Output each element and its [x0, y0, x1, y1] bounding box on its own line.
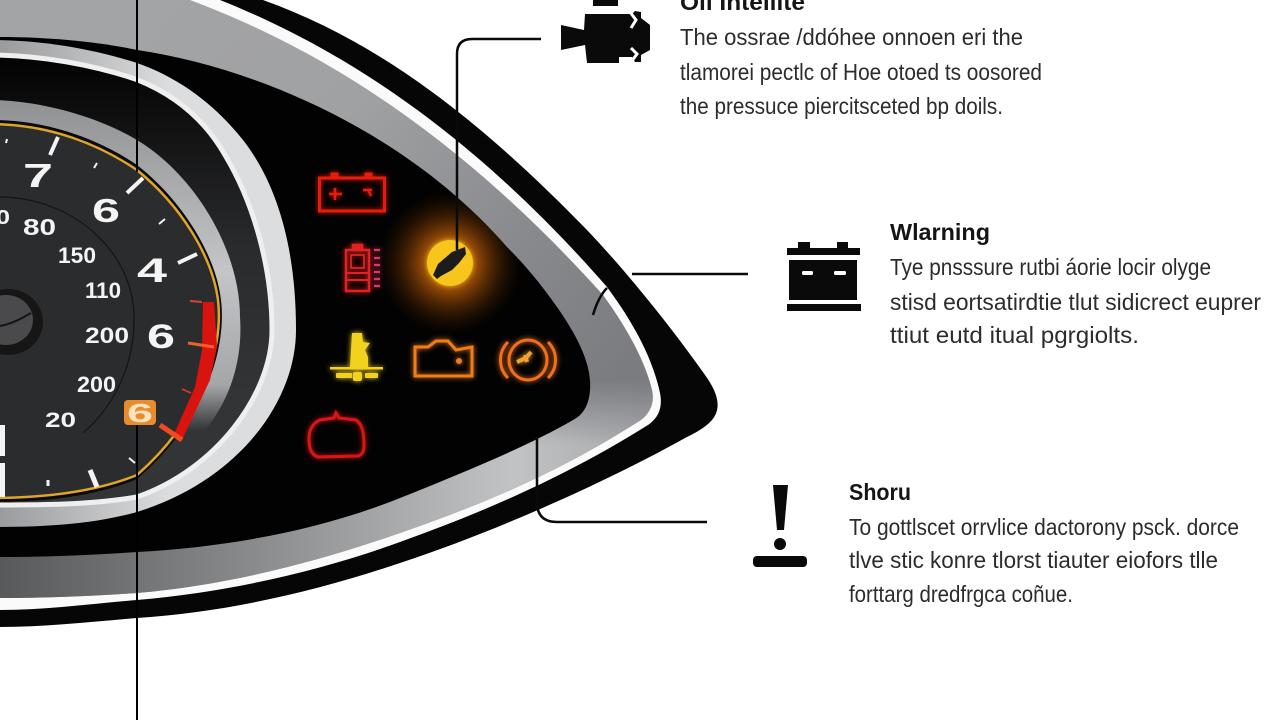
callout arrow: short	[537, 438, 707, 522]
text block: oil interlite	[680, 0, 1042, 119]
gauge numerals: 150	[58, 243, 96, 268]
text block: warning: Wlarning	[890, 219, 990, 245]
gauge numerals: 7	[23, 157, 53, 194]
icon: engine	[561, 0, 650, 63]
icon: battery	[787, 242, 861, 311]
warning light: red oil outline	[309, 413, 364, 457]
gauge numerals: 110	[85, 278, 121, 303]
warning light: orange engine outline	[415, 341, 472, 376]
text block: warning	[890, 219, 1261, 348]
text block: short: Shoru	[849, 479, 911, 505]
gauge numerals: 6	[92, 192, 120, 229]
gauge numerals: 200	[85, 323, 129, 348]
gauge	[0, 40, 296, 527]
text block: short	[849, 479, 1239, 607]
black display panel	[0, 37, 590, 557]
long vertical divider line	[136, 0, 138, 720]
gauge numerals: 80	[23, 214, 56, 240]
text block: short: forttarg dredfrgca coñue.	[849, 581, 1073, 607]
callout arrow: warning	[593, 274, 748, 315]
gauge numerals: 6	[147, 318, 175, 356]
text block: short: To gottlscet orrvlice dactorony psck. dorce	[849, 514, 1239, 540]
warning light: orange brake	[500, 340, 556, 380]
tick marks	[6, 137, 197, 487]
gauge numerals: 4	[137, 252, 167, 290]
text block: oil interlite: The ossrae /ddóhee onnoen eri the	[680, 24, 1023, 50]
icon: exclamation mark	[753, 485, 807, 567]
warning light: yellow engine lamp	[427, 240, 473, 286]
gauge numerals: 20	[45, 409, 76, 432]
text block: warning: ttiut eutd itual pgrgiolts.	[890, 322, 1139, 348]
warning light: yellow oil level	[330, 333, 383, 381]
orange gear badge: 6	[127, 398, 153, 428]
text block: warning: stisd eortsatirdtie tlut sidicrect euprer	[890, 289, 1261, 315]
gauge numerals	[0, 157, 175, 497]
instrument cluster housing	[0, 0, 718, 627]
amber glow	[384, 197, 516, 328]
text block: oil interlite: the pressuce piercitsceted bp doils.	[680, 93, 1003, 119]
orange gear badge	[124, 398, 156, 428]
gauge numerals: 200	[77, 372, 116, 397]
warning light: red coolant gauge	[346, 245, 380, 291]
needle hub	[0, 289, 43, 355]
text block: short: tlve stic konre tlorst tiauter eiofors tlle	[849, 547, 1218, 573]
red zone	[160, 301, 217, 440]
text block: oil interlite: tlamorei pectlc of Hoe otoed ts oosored	[680, 59, 1042, 85]
warning light: red battery	[320, 173, 384, 211]
text block: warning: Tye pnsssure rutbi áorie locir olyge	[890, 254, 1211, 280]
callout arrow: engine light	[457, 39, 541, 250]
